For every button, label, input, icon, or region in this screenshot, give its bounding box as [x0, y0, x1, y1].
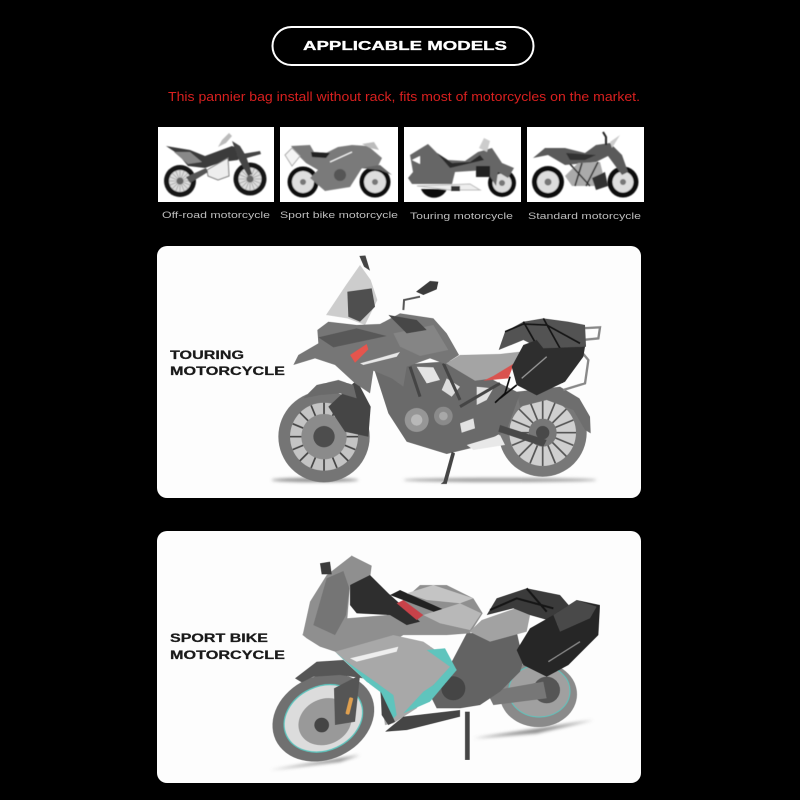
engine and frame — [423, 632, 523, 708]
side panel with teal trim — [335, 635, 457, 725]
pannier bag — [499, 318, 586, 350]
front wheel — [258, 658, 389, 778]
mirror — [403, 297, 420, 310]
fairing and tank — [293, 313, 459, 393]
label: standard motorcycle: Standard motorcycle — [528, 211, 641, 222]
seat — [446, 352, 520, 381]
panel: sport bike motorcycle photo — [157, 531, 641, 783]
front wheel — [278, 391, 370, 482]
image: sport bike with pannier bags — [258, 556, 600, 778]
image: touring motorcycle with pannier bags — [272, 255, 600, 484]
side stand — [441, 452, 455, 484]
title pill: APPLICABLE MODELS — [303, 38, 507, 53]
windscreen — [326, 265, 377, 325]
label: off-road motorcycle: Off-road motorcycle — [162, 210, 270, 221]
panel: off-road motorcycle — [158, 127, 274, 202]
heading: sport bike motorcycle — [170, 631, 285, 662]
panel: standard motorcycle — [527, 127, 644, 202]
frame and engine — [373, 360, 520, 454]
heading: touring motorcycle — [170, 348, 285, 378]
subtitle: This pannier bag install without rack, fits most of motorcycles on the market. — [168, 89, 640, 104]
panel: sport bike motorcycle — [280, 127, 398, 202]
rack — [563, 327, 600, 390]
side stand — [465, 712, 470, 760]
heading: sport bike motorcycle: SPORT BIKE — [170, 631, 268, 645]
fairing — [303, 556, 483, 660]
label: touring motorcycle: Touring motorcycle — [410, 211, 513, 222]
pannier bag — [487, 588, 570, 622]
panel: touring motorcycle photo — [157, 246, 641, 498]
panel: touring motorcycle — [404, 127, 521, 202]
heading: touring motorcycle: MOTORCYCLE — [170, 364, 285, 378]
label: sport bike motorcycle: Sport bike motorcycle — [280, 210, 398, 221]
rear wheel — [499, 389, 587, 477]
title pill — [272, 27, 534, 65]
seat — [469, 607, 530, 642]
rear wheel — [500, 662, 577, 727]
heading: touring motorcycle: TOURING — [170, 348, 244, 362]
heading: sport bike motorcycle: MOTORCYCLE — [170, 648, 285, 662]
